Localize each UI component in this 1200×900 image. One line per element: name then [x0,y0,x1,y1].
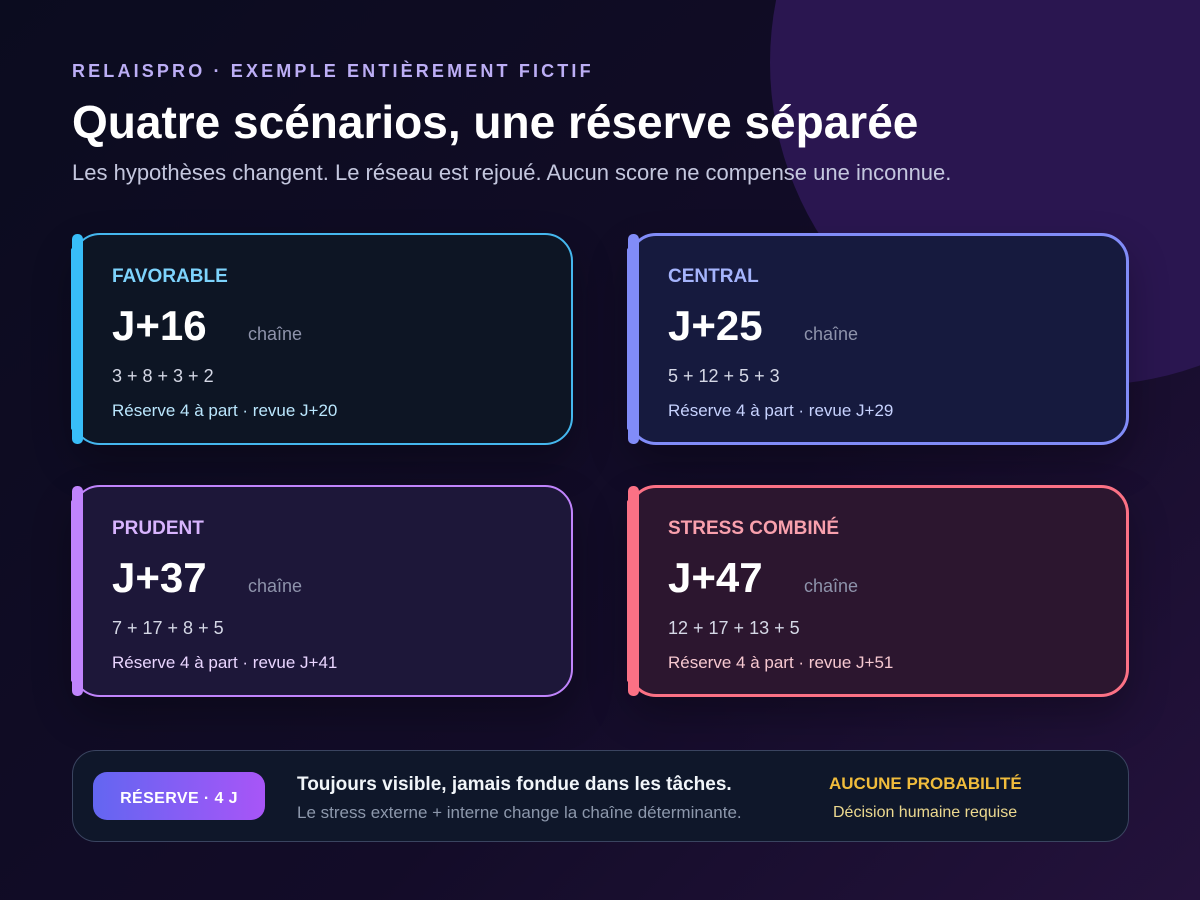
title: Quatre scénarios, une réserve séparée [72,96,918,148]
central value: J+25 [668,302,763,349]
eyebrow: RELAISPRO · EXEMPLE ENTIÈREMENT FICTIF [72,61,594,81]
stress heading: STRESS COMBINÉ [668,518,839,539]
accent bar: stress [628,486,639,696]
stress sum: 12 + 17 + 13 + 5 [668,618,800,638]
stress chain label: chaîne [804,576,858,596]
reserve badge: RÉSERVE · 4 J [120,790,238,807]
banner detail: Le stress externe + interne change la chaîne déterminante. [297,803,742,822]
central reserve note: Réserve 4 à part · revue J+29 [668,401,893,420]
panel: central [628,233,1129,445]
prudent sum: 7 + 17 + 8 + 5 [112,618,224,638]
favorable sum: 3 + 8 + 3 + 2 [112,366,214,386]
central sum: 5 + 12 + 5 + 3 [668,366,780,386]
human decision note: Décision humaine requise [833,804,1017,821]
favorable value: J+16 [112,302,207,349]
stress value: J+47 [668,554,763,601]
prudent value: J+37 [112,554,207,601]
prudent heading: PRUDENT [112,518,204,539]
banner headline: Toujours visible, jamais fondue dans les tâches. [297,774,732,795]
prudent chain label: chaîne [248,576,302,596]
panel: reserve banner [72,750,1129,842]
panel: prudent [72,485,573,697]
accent bar: prudent [72,486,83,696]
stress reserve note: Réserve 4 à part · revue J+51 [668,653,893,672]
accent bar: favorable [72,234,83,444]
central heading: CENTRAL [668,266,759,287]
favorable reserve note: Réserve 4 à part · revue J+20 [112,401,337,420]
favorable chain label: chaîne [248,324,302,344]
prudent reserve note: Réserve 4 à part · revue J+41 [112,653,337,672]
central chain label: chaîne [804,324,858,344]
reserve badge [93,772,265,820]
panel: favorable [72,233,573,445]
background circle [770,0,1200,385]
no probability label: AUCUNE PROBABILITÉ [829,774,1022,793]
subtitle: Les hypothèses changent. Le réseau est rejoué. Aucun score ne compense une inconnue. [72,160,951,185]
accent bar: central [628,234,639,444]
favorable heading: FAVORABLE [112,266,228,287]
panel: stress combiné [628,485,1129,697]
